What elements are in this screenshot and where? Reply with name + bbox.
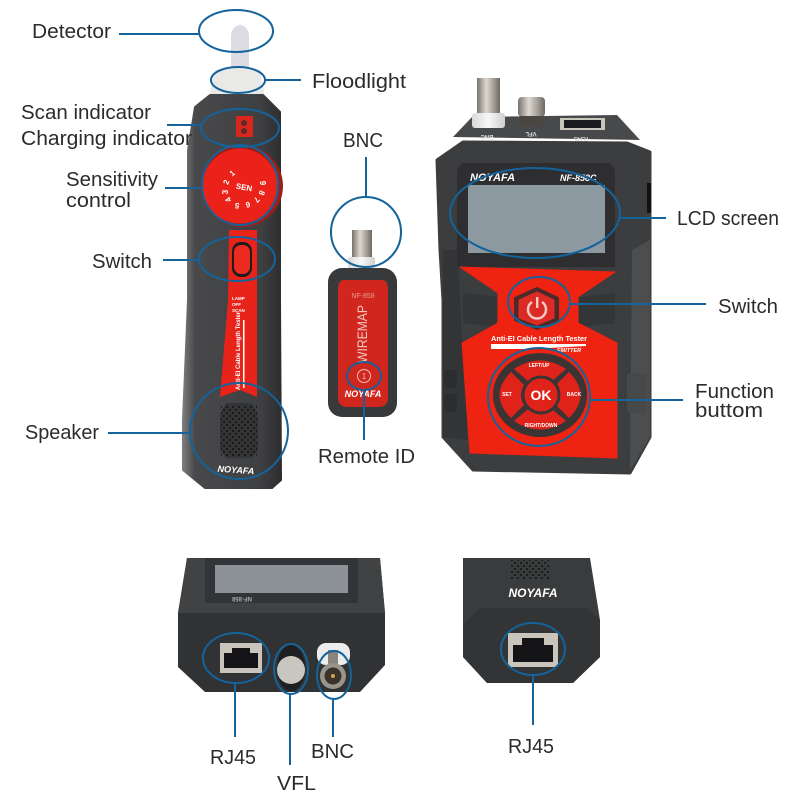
- main tester: [437, 78, 651, 473]
- brand text: [470, 172, 597, 184]
- label: LCD screen: LCD screen: [677, 208, 779, 230]
- indicator lights: [236, 116, 253, 137]
- top connectors: [453, 78, 640, 141]
- label: Floodlight: Floodlight: [312, 71, 406, 93]
- label: Switch left: Switch: [92, 251, 152, 273]
- label: Detector: Detector: [32, 21, 111, 43]
- probe body: [183, 95, 281, 488]
- label: buttom: buttom: [695, 400, 763, 422]
- top connectors: RJ45: [573, 135, 588, 141]
- label: Sensitivity: Sensitivity: [66, 169, 158, 191]
- label: Switch right: Switch: [718, 296, 778, 318]
- red panel: [460, 267, 617, 458]
- red label strip: Anti-EI Cable Length Tester: [236, 311, 242, 390]
- model label: NF-858: [231, 595, 252, 601]
- label: Function: Function: [695, 381, 774, 403]
- probe logo: NOYAFA: [217, 464, 255, 476]
- tester title: [491, 334, 587, 354]
- logo: NOYAFA: [508, 586, 558, 600]
- probe device: [183, 25, 283, 488]
- red label strip: OFF: [232, 302, 241, 307]
- label: Scan indicator: Scan indicator: [21, 102, 151, 124]
- sensitivity dial: 1: [228, 168, 237, 178]
- screen bezel: [457, 163, 615, 267]
- red label strip: [220, 230, 257, 397]
- function buttons: LEFT/UP: [529, 363, 550, 369]
- top connectors: BNC: [480, 133, 494, 139]
- device screen: [205, 558, 358, 603]
- function buttons: RIGHT/DOWN: [525, 423, 558, 429]
- device top face: [178, 558, 385, 613]
- label: BNC bottom: BNC: [311, 741, 354, 763]
- label: BNC top: BNC: [343, 130, 383, 152]
- tester body: [437, 142, 650, 473]
- sensitivity dial: SEN: [235, 182, 253, 193]
- lower left device view: [178, 558, 385, 692]
- remote label: NF-858: [351, 293, 375, 300]
- remote end face: [463, 608, 600, 683]
- right side shell and grips: [443, 183, 651, 470]
- icon: floodlight cone: [209, 67, 265, 97]
- LCD screen: [468, 185, 605, 253]
- remote label: 1: [362, 372, 367, 381]
- sensitivity dial: [201, 145, 283, 227]
- remote unit: [328, 230, 397, 417]
- label: VFL: VFL: [277, 773, 316, 795]
- device end body: [178, 558, 385, 692]
- BNC port: [317, 643, 350, 689]
- sensitivity dial: 5: [234, 201, 240, 210]
- label: Charging indicator: Charging indicator: [21, 128, 192, 150]
- top connectors: VFL: [525, 130, 537, 136]
- label: control: control: [66, 190, 131, 212]
- slide switch: [232, 242, 252, 277]
- RJ45 port: [508, 633, 558, 667]
- label: Speaker: Speaker: [25, 422, 99, 444]
- lower right device view: [463, 558, 600, 683]
- sensitivity dial: 2: [221, 178, 232, 186]
- label: RJ45 right: RJ45: [508, 736, 554, 758]
- annotation ellipses: [190, 10, 620, 699]
- icon: detector tip: [231, 25, 249, 72]
- function buttons: BACK: [567, 392, 582, 398]
- tester title: EMITTER: [557, 348, 581, 354]
- VFL port: [277, 645, 305, 691]
- label: RJ45 left: RJ45: [210, 747, 256, 769]
- red label strip: SCAN: [232, 308, 245, 313]
- sensitivity dial: 8: [256, 189, 267, 197]
- remote body: [328, 268, 397, 417]
- brand text: NOYAFA: [470, 172, 515, 184]
- RJ45 port: [220, 643, 262, 673]
- function buttons: [493, 353, 587, 437]
- brand text: NF-858C: [560, 173, 597, 183]
- sensitivity dial: 3: [221, 189, 230, 194]
- grille: [510, 560, 550, 580]
- sensitivity dial: 4: [223, 195, 233, 204]
- remote label: WIREMAP: [354, 305, 370, 363]
- leader lines: [108, 34, 706, 765]
- label: Remote ID: Remote ID: [318, 446, 415, 468]
- sensitivity dial: 9: [258, 181, 267, 186]
- function buttons: OK: [530, 387, 552, 403]
- remote label: [338, 280, 388, 407]
- remote label: NOYAFA: [345, 389, 381, 399]
- speaker grille: [220, 403, 258, 458]
- power button: [515, 288, 558, 329]
- function buttons: SET: [502, 392, 512, 398]
- sensitivity dial: 7: [251, 195, 261, 205]
- sensitivity dial: 6: [244, 200, 251, 209]
- tester title: Anti-EI Cable Length Tester: [491, 334, 587, 343]
- red label strip: LAMP: [232, 296, 245, 301]
- remote barrel: [463, 558, 600, 683]
- remote BNC connector: [348, 230, 375, 268]
